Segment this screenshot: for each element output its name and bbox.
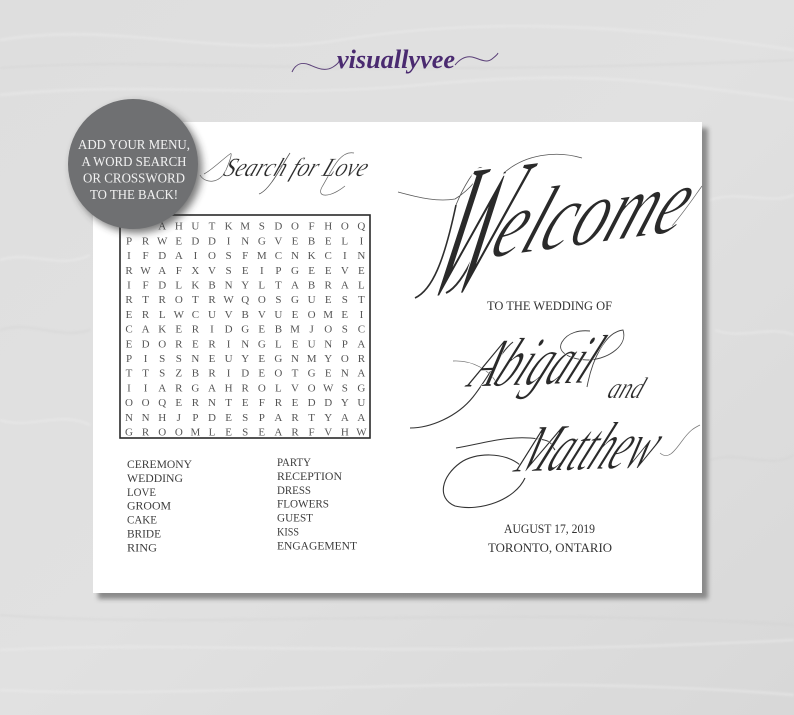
script name: Abigail and Matthew: Matthew [503, 407, 679, 488]
script name: Abigail and Matthew [410, 321, 700, 508]
word search grid: PISSNEUYEGNMYOR [126, 353, 366, 365]
word search grid: RWAFXVSEIPGEEVE [125, 265, 365, 277]
word search grid: AHUTKMSDOFHOQ [158, 221, 365, 233]
heading: Search for Love: Search for Love [219, 154, 373, 182]
word search grid: CAKERIDGEBMJOSC [125, 324, 365, 336]
logo: visuallyvee [292, 45, 498, 74]
word list: right column: RECEPTION [277, 471, 343, 483]
word search grid: PRWEDDINGVEBELI [126, 235, 364, 247]
callout: grey circle badge: ADD YOUR MENU, [78, 137, 190, 152]
event date and place: AUGUST 17, 2019 [504, 521, 595, 536]
callout: grey circle badge: OR CROSSWORD [83, 170, 185, 186]
word search grid: EDORERINGLEUNPA [126, 338, 365, 350]
word search grid: GROOMLESEARFVHW [125, 426, 367, 438]
word list: right column: ENGAGEMENT [277, 540, 357, 552]
word search grid: NNHJPDESPARTYAA [125, 412, 365, 424]
word search grid: IFDAIOSFMCNKCIN [127, 250, 365, 262]
word search grid: OOQERNTEFREDDYU [125, 397, 365, 409]
event date and place: TORONTO, ONTARIO [488, 540, 612, 555]
script title: Welcome [398, 117, 713, 338]
word list: right column: GUEST [277, 512, 313, 524]
callout: grey circle badge: TO THE BACK! [90, 187, 178, 202]
word list: left column: LOVE [127, 487, 156, 499]
word list: right column: PARTY [277, 457, 312, 469]
event date and place [488, 521, 612, 555]
subtitle: to the wedding of: TO THE WEDDING OF [487, 299, 612, 313]
word list: right column: DRESS [277, 485, 311, 497]
word search grid: IFDLKBNYLTABRAL [127, 280, 365, 292]
word list: left column: CEREMONY [127, 459, 193, 471]
word search grid: ERLWCUVBVUEOMEI [126, 309, 364, 321]
word list: left column [127, 459, 193, 554]
word search grid: TTSZBRIDEOTGENA [126, 368, 365, 380]
script name: Abigail and Matthew: and [603, 372, 651, 406]
panel: white program card [93, 117, 713, 593]
script name: Abigail and Matthew: Abigail [455, 321, 617, 403]
word list: right column: KISS [277, 526, 299, 538]
callout: grey circle badge: A WORD SEARCH [82, 154, 187, 169]
word list: left column: BRIDE [127, 528, 161, 540]
script title: Welcome: W [405, 117, 556, 338]
heading: Search for Love [200, 153, 373, 195]
word list: left column: CAKE [127, 514, 157, 526]
logo: visuallyvee: visuallyvee [337, 45, 455, 74]
word list: left column: GROOM [127, 501, 171, 513]
panel: card shadow [98, 128, 708, 599]
script title: Welcome: elcome [479, 146, 713, 279]
word list: right column: FLOWERS [277, 499, 329, 511]
word list: left column: WEDDING [127, 473, 183, 485]
word list: right column [277, 457, 357, 552]
word search grid: IIARGAHROLVOWSG [127, 382, 365, 394]
word search grid: RTROTRWQOSGUEST [125, 294, 365, 306]
word search grid [120, 215, 370, 438]
callout: grey circle badge [68, 99, 198, 229]
circle shadow [72, 103, 202, 233]
word list: left column: RING [127, 542, 157, 554]
